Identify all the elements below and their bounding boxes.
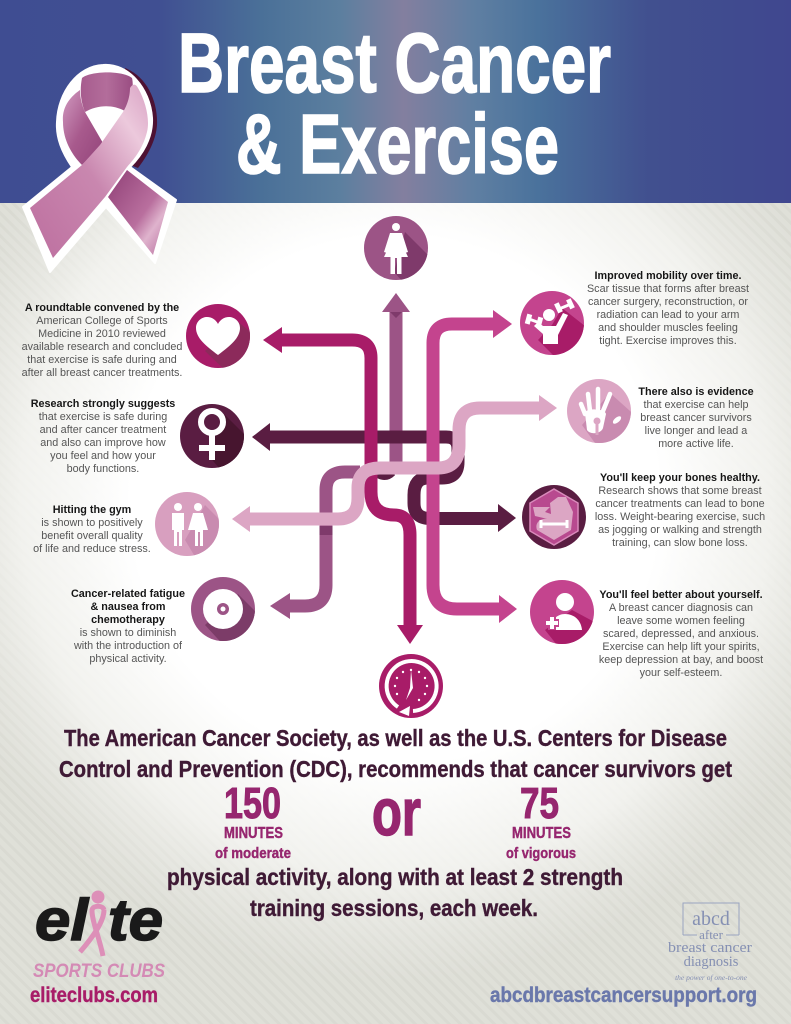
text: feel better: You'll feel better about yourself. <box>599 589 763 601</box>
logo: abcd after breast cancer diagnosis: the power of one-to-one <box>675 973 748 982</box>
text: research suggests: Research strongly suggests <box>31 398 175 410</box>
text: roundtable: A roundtable convened by the <box>25 302 179 314</box>
stat: 150 minutes: 150 <box>224 779 281 828</box>
text: improved mobility: Scar tissue that forms after breast <box>587 283 749 295</box>
text: research suggests: and after cancer treatment <box>40 424 166 436</box>
arrow: dark plum <box>252 423 516 532</box>
arrow: purple up <box>382 293 410 462</box>
icon: heart <box>186 304 250 368</box>
text: bones: as jogging or walking and strength <box>598 524 762 536</box>
closing text <box>167 864 623 921</box>
arrows <box>232 293 557 644</box>
text: bones: loss. Weight-bearing exercise, such <box>595 511 765 523</box>
icon: couple <box>155 492 219 556</box>
text: bones: cancer treatments can lead to bone <box>595 498 765 510</box>
text: evidence: There also is evidence <box>638 386 754 398</box>
closing text: physical activity, along with at least 2 strength <box>167 864 623 890</box>
stat: 150 minutes: MINUTES <box>224 825 283 842</box>
text: hitting the gym: of life and reduce stress. <box>33 543 151 555</box>
logo: elite sports clubs: te <box>108 888 163 953</box>
recommendation heading <box>59 725 732 782</box>
logo: abcd after breast cancer diagnosis: breast cancer <box>668 940 752 956</box>
arrow: pink <box>433 310 517 623</box>
text: roundtable: after all breast cancer treatments. <box>22 367 182 379</box>
text: roundtable: American College of Sports <box>36 315 168 327</box>
text: research suggests <box>31 398 175 475</box>
text: bones <box>595 472 765 549</box>
text: hitting the gym: is shown to positively <box>41 517 143 529</box>
text: roundtable: that exercise is safe during and <box>27 354 177 366</box>
stat: 150 minutes <box>215 779 291 862</box>
text: fatigue and nausea: physical activity. <box>89 653 167 665</box>
text: bones: You'll keep your bones healthy. <box>600 472 760 484</box>
title: Breast Cancer <box>178 16 611 110</box>
text: evidence: that exercise can help <box>643 399 749 411</box>
logo: abcd after breast cancer diagnosis <box>668 903 752 982</box>
text: evidence: more active life. <box>658 438 734 450</box>
logo: elite sports clubs: el <box>35 888 90 953</box>
text: improved mobility: cancer surgery, reconstruction, or <box>588 296 748 308</box>
icon: dumbbell person <box>520 291 584 355</box>
text: improved mobility: radiation can lead to your arm <box>597 309 739 321</box>
text: improved mobility <box>587 270 749 347</box>
text: evidence: breast cancer survivors <box>640 412 752 424</box>
icon: pink ribbon <box>23 65 176 272</box>
icon: venus symbol <box>180 404 244 468</box>
stat: 75 minutes: of vigorous <box>506 845 576 862</box>
text: roundtable: available research and concluded <box>22 341 182 353</box>
website: abcd: abcdbreastcancersupport.org <box>490 984 757 1007</box>
text: fatigue and nausea <box>71 588 185 665</box>
arrow: magenta <box>263 327 423 644</box>
text: feel better <box>599 589 763 679</box>
stat: or: or <box>372 775 421 849</box>
text: improved mobility: tight. Exercise improves this. <box>599 335 737 347</box>
text: feel better: keep depression at bay, and boost <box>599 654 763 666</box>
text: feel better: your self-esteem. <box>640 667 722 679</box>
arrow: light pink <box>232 395 557 532</box>
text: improved mobility: and shoulder muscles feeling <box>598 322 738 334</box>
text: hitting the gym: benefit overall quality <box>41 530 143 542</box>
text: feel better: leave some women feeling <box>617 615 745 627</box>
stat: 75 minutes: MINUTES <box>512 825 571 842</box>
icon: flexed arm on hexagon <box>522 485 586 549</box>
logo: abcd after breast cancer diagnosis: diagnosis <box>684 954 739 970</box>
text: research suggests: and also can improve how <box>40 437 166 449</box>
text: feel better: Exercise can help lift your spirits, <box>602 641 760 653</box>
text: research suggests: you feel and how your <box>50 450 156 462</box>
text: roundtable: Medicine in 2010 reviewed <box>38 328 166 340</box>
header band <box>0 0 791 203</box>
icon: clock <box>379 654 443 718</box>
stat: 75 minutes: 75 <box>520 779 559 828</box>
logo: elite sports clubs <box>30 888 165 1007</box>
stat: 150 minutes: of moderate <box>215 845 291 862</box>
icon: target disc <box>191 577 255 641</box>
text: fatigue and nausea: is shown to diminish <box>80 627 176 639</box>
text: improved mobility: Improved mobility over time. <box>594 270 742 282</box>
closing text: training sessions, each week. <box>250 895 538 921</box>
text: hitting the gym: Hitting the gym <box>53 504 131 516</box>
title <box>178 16 611 191</box>
text: feel better: scared, depressed, and anxious. <box>603 628 759 640</box>
text: hitting the gym <box>33 504 151 555</box>
text: fatigue and nausea: Cancer-related fatigue <box>71 588 185 600</box>
text: bones: training, can slow bone loss. <box>612 537 748 549</box>
text: fatigue and nausea: chemotherapy <box>91 614 165 626</box>
arrow: purple lower left <box>270 472 360 619</box>
icon: person with plus <box>530 580 594 644</box>
text: roundtable <box>22 302 182 379</box>
text: bones: Research shows that some breast <box>598 485 762 497</box>
text: feel better: A breast cancer diagnosis can <box>609 602 753 614</box>
text: evidence <box>638 386 754 450</box>
logo: abcd after breast cancer diagnosis: after <box>699 927 724 942</box>
stat: 75 minutes <box>506 779 576 862</box>
text: research suggests: that exercise is safe during <box>39 411 167 423</box>
logo: elite sports clubs: SPORTS CLUBS <box>33 961 165 982</box>
icon: hand print <box>567 379 631 443</box>
text: fatigue and nausea: with the introduction of <box>73 640 183 652</box>
text: research suggests: body functions. <box>67 463 139 475</box>
title: & Exercise <box>236 97 559 191</box>
icon: woman <box>364 216 428 280</box>
logo: abcd after breast cancer diagnosis: abcd <box>692 908 730 930</box>
text: fatigue and nausea: & nausea from <box>90 601 166 613</box>
logo: elite sports clubs: eliteclubs.com <box>30 984 158 1007</box>
text: evidence: live longer and lead a <box>645 425 747 437</box>
